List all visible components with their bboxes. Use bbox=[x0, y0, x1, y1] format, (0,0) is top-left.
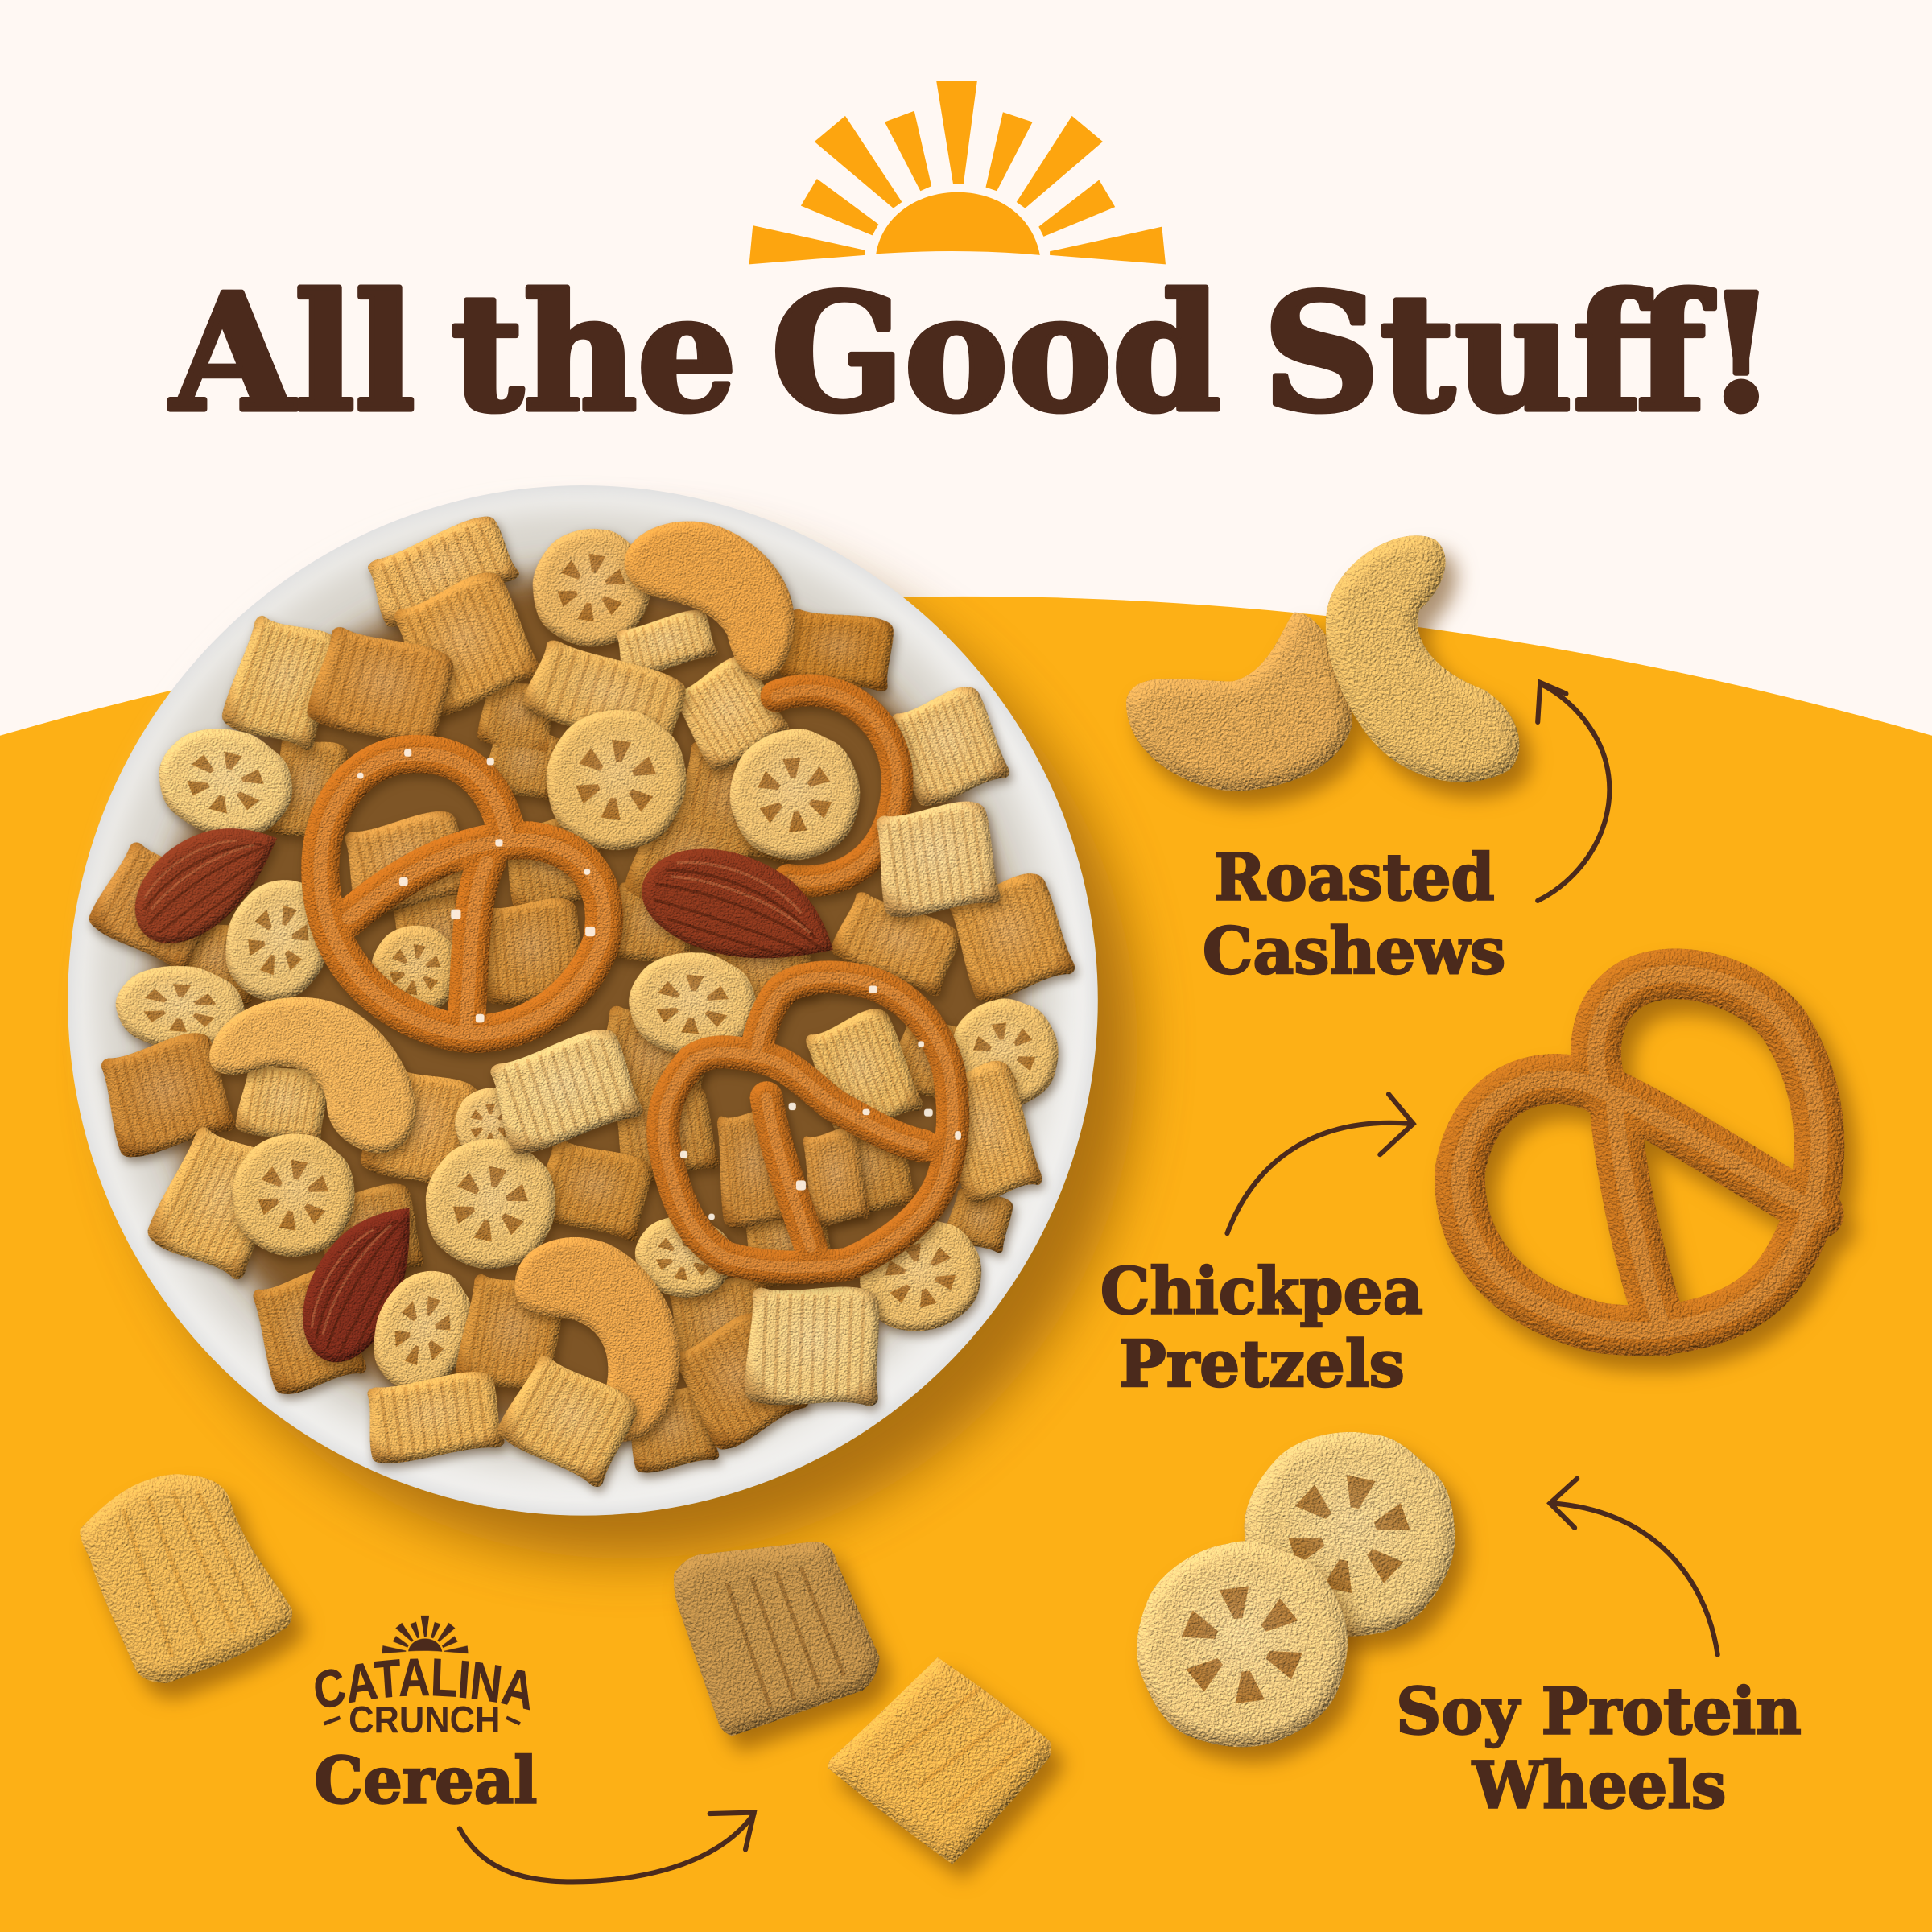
cereal piece bbox=[453, 1269, 569, 1398]
pretzel bbox=[320, 754, 604, 1034]
wheel bbox=[147, 713, 305, 851]
label: chickpea pretzels: Pretzels bbox=[1119, 1326, 1405, 1402]
cereal piece bbox=[800, 1126, 871, 1228]
label: roasted cashews bbox=[1203, 839, 1505, 989]
cereal piece: golden bbox=[828, 1657, 1051, 1864]
cereal piece bbox=[142, 1120, 295, 1284]
wheel bbox=[112, 960, 248, 1055]
cereal piece bbox=[95, 1027, 237, 1162]
label: soy protein wheels bbox=[1396, 1674, 1802, 1823]
back filler cereal bbox=[167, 675, 1016, 1476]
cereal piece bbox=[304, 621, 460, 755]
cereal piece bbox=[248, 1264, 369, 1398]
orange hill panel bbox=[0, 597, 1932, 1932]
title: All bbox=[170, 258, 415, 447]
cereal piece bbox=[493, 1348, 645, 1491]
cereal piece bbox=[667, 1306, 812, 1455]
cashew: roasted left bbox=[1126, 613, 1352, 791]
bowl bbox=[68, 485, 1098, 1516]
almond bbox=[277, 1183, 445, 1377]
title: Good bbox=[771, 258, 1221, 447]
wheel bbox=[625, 947, 761, 1061]
title: Stuff! bbox=[1263, 258, 1777, 447]
cereal piece bbox=[357, 1061, 485, 1195]
cereal piece bbox=[218, 609, 348, 754]
salt crystals bbox=[357, 749, 961, 1220]
cashew bbox=[209, 997, 416, 1154]
wheel bbox=[537, 700, 696, 859]
arrow to wheels bbox=[1550, 1479, 1718, 1655]
wheel bbox=[523, 518, 660, 656]
cereal piece bbox=[886, 681, 1012, 811]
cereal piece bbox=[612, 606, 719, 681]
almond bbox=[113, 799, 299, 960]
cereal piece: left bbox=[80, 1474, 292, 1683]
logo sun bbox=[382, 1616, 469, 1653]
cereal piece bbox=[387, 565, 545, 722]
cereal piece bbox=[714, 1107, 795, 1230]
cereal piece bbox=[520, 634, 692, 758]
label: cereal: Cereal bbox=[314, 1742, 537, 1818]
wheel bbox=[357, 1257, 488, 1405]
label: chickpea pretzels: Chickpea bbox=[1100, 1253, 1423, 1329]
cereal piece bbox=[530, 1134, 658, 1245]
wheel bbox=[847, 1205, 994, 1344]
cereal piece bbox=[667, 650, 792, 775]
logo word: Catalina: CATALINA bbox=[315, 1658, 530, 1710]
cereal piece bbox=[233, 1059, 332, 1147]
wheel bbox=[724, 724, 865, 865]
bowl shadow bbox=[114, 536, 1137, 1558]
cereal piece bbox=[362, 1368, 506, 1467]
arrow to pretzel bbox=[1227, 1094, 1414, 1233]
arrow to cereal bbox=[460, 1813, 754, 1881]
Catalina Crunch logo bbox=[315, 1615, 530, 1740]
cereal piece bbox=[943, 868, 1077, 1006]
label: chickpea pretzels bbox=[1100, 1253, 1423, 1402]
wheel bbox=[364, 918, 467, 1021]
cereal piece bbox=[828, 886, 966, 999]
cereal piece bbox=[483, 1022, 646, 1159]
title bbox=[170, 258, 1777, 447]
wheel bbox=[209, 864, 349, 1016]
title: the bbox=[451, 258, 737, 447]
cereal piece bbox=[339, 807, 474, 919]
pretzel bbox=[663, 977, 953, 1267]
large chickpea pretzel bbox=[1460, 974, 1819, 1331]
logo word: Crunch: CRUNCH bbox=[349, 1699, 500, 1740]
cashew: roasted right bbox=[1326, 535, 1520, 782]
cashew bbox=[514, 1237, 680, 1442]
wheel bbox=[942, 990, 1067, 1117]
wheel bbox=[630, 1209, 738, 1304]
wheel: soy protein front bbox=[1123, 1528, 1361, 1761]
wheel bbox=[413, 1126, 568, 1282]
cereal piece bbox=[799, 1003, 926, 1141]
wheel: soy protein back bbox=[1224, 1411, 1474, 1656]
cashew bbox=[625, 521, 795, 680]
label: soy protein wheels: Wheels bbox=[1472, 1747, 1726, 1823]
cereal piece bbox=[745, 1283, 882, 1409]
wheel bbox=[455, 1088, 526, 1159]
cereal piece bbox=[932, 1056, 1044, 1207]
cereal piece bbox=[361, 510, 522, 632]
arrow to cashews bbox=[1538, 683, 1609, 901]
label: roasted cashews: Roasted bbox=[1214, 839, 1495, 914]
sun logo bbox=[749, 81, 1166, 264]
almond bbox=[628, 824, 853, 995]
cereal piece bbox=[85, 836, 230, 976]
label: roasted cashews: Cashews bbox=[1203, 913, 1505, 989]
wheel bbox=[222, 1123, 365, 1266]
cereal piece bbox=[478, 896, 586, 1007]
cereal piece bbox=[778, 605, 897, 694]
cereal piece: brown bbox=[674, 1542, 880, 1736]
background pretzel arc bbox=[776, 690, 898, 881]
cereal piece bbox=[871, 798, 1001, 920]
label: soy protein wheels: Soy Protein bbox=[1396, 1674, 1802, 1749]
